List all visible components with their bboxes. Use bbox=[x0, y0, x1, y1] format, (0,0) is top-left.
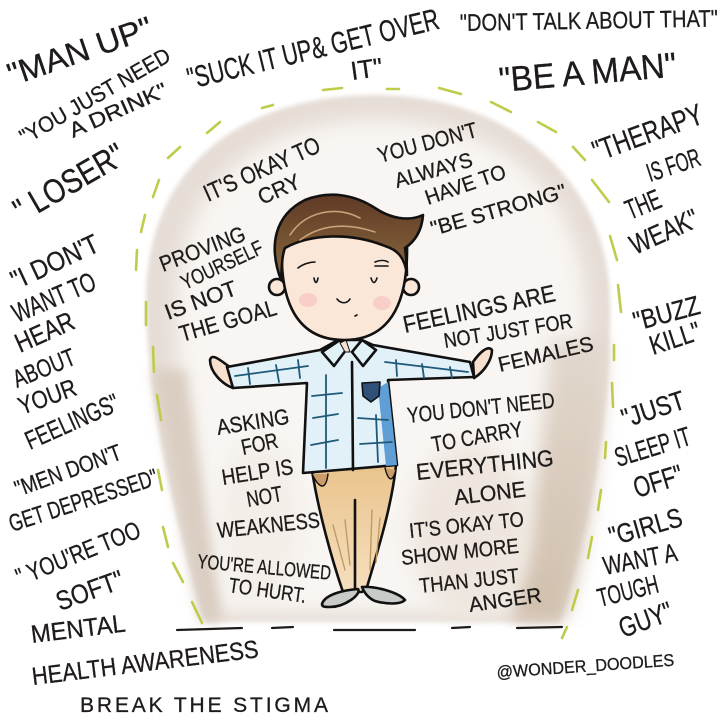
quote: you're too soft: " YOU'RE TOO bbox=[12, 516, 145, 592]
message: it's okay to show more than just anger: ANGER bbox=[467, 584, 543, 617]
heading: mental health awareness: MENTAL bbox=[29, 610, 127, 649]
message: proving yourself is not the goal: THE GOAL bbox=[176, 294, 280, 347]
message: you don't always have to be strong: "BE STRONG" bbox=[428, 180, 569, 241]
ground dashes bbox=[177, 627, 562, 630]
inner supportive messages bbox=[156, 117, 596, 617]
message: you don't need to carry everything alone: EVERYTHING bbox=[415, 445, 555, 485]
quote: suck it up and get over it: IT" bbox=[349, 52, 385, 86]
heading: mental health awareness: HEALTH AWARENESS bbox=[30, 635, 260, 691]
message: you don't need to carry everything alone bbox=[406, 388, 556, 510]
heading: mental health awareness bbox=[29, 610, 260, 691]
message: you're allowed to hurt: YOU'RE ALLOWED bbox=[197, 551, 332, 585]
quote: just sleep it off: "JUST bbox=[618, 385, 689, 434]
message: feelings are not just for females: FEELINGS ARE bbox=[401, 280, 558, 339]
message: feelings are not just for females: NOT JUST FOR bbox=[442, 310, 574, 353]
subheading: break the stigma: BREAK THE STIGMA bbox=[80, 694, 328, 717]
quote: girls want a tough guy bbox=[594, 502, 686, 644]
credit: @WONDER_DOODLES bbox=[496, 651, 675, 682]
message: asking for help is not weakness bbox=[215, 404, 321, 543]
quote: therapy is for the weak: WEAK" bbox=[625, 203, 703, 260]
message: proving yourself is not the goal bbox=[156, 221, 280, 347]
message: feelings are not just for females bbox=[401, 280, 596, 377]
message: you don't need to carry everything alone: TO CARRY bbox=[430, 416, 525, 457]
message: it's okay to cry: CRY bbox=[254, 169, 305, 210]
quote: just sleep it off bbox=[611, 385, 694, 505]
shirt plaid bbox=[235, 360, 468, 468]
collar bbox=[322, 340, 346, 366]
quote: girls want a tough guy: "GIRLS bbox=[605, 502, 686, 552]
button line bbox=[352, 362, 353, 470]
quote: you're too soft bbox=[12, 516, 145, 617]
message: proving yourself is not the goal: PROVING bbox=[156, 221, 249, 277]
message: it's okay to cry: IT'S OKAY TO bbox=[199, 132, 325, 207]
message: you don't always have to be strong: ALWAYS bbox=[392, 149, 475, 193]
quote: i don't want to hear about your feelings: HEAR bbox=[10, 306, 79, 358]
quote: you just need a drink: A DRINK" bbox=[66, 79, 171, 143]
message: asking for help is not weakness: NOT bbox=[245, 481, 284, 512]
message: you don't need to carry everything alone: YOU DON'T NEED bbox=[406, 388, 556, 428]
shirt bbox=[227, 340, 474, 473]
hands bbox=[210, 357, 233, 388]
quote: man up: "MAN UP" bbox=[3, 9, 157, 93]
quote: girls want a tough guy: TOUGH bbox=[594, 569, 662, 613]
shoes bbox=[322, 589, 359, 607]
quote: therapy is for the weak bbox=[588, 98, 707, 260]
dome dashed outline bbox=[136, 88, 621, 638]
quote: i don't want to hear about your feelings: YOUR bbox=[14, 374, 80, 421]
message: asking for help is not weakness: FOR bbox=[239, 428, 280, 460]
figure: man with outstretched arms bbox=[210, 195, 492, 607]
quote: men don't get depressed: "MEN DON'T bbox=[11, 439, 125, 502]
quote: buzz kill: KILL" bbox=[646, 316, 704, 361]
message: you don't always have to be strong: YOU DON'T bbox=[375, 117, 480, 168]
quote: men don't get depressed bbox=[6, 439, 161, 538]
message: it's okay to show more than just anger: THAN JUST bbox=[418, 565, 520, 598]
quote: buzz kill: "BUZZ bbox=[630, 290, 703, 337]
quote: i don't want to hear about your feelings bbox=[6, 229, 124, 455]
message: asking for help is not weakness: ASKING bbox=[215, 404, 291, 440]
message: feelings are not just for females: FEMALES bbox=[496, 333, 596, 377]
message: proving yourself is not the goal: YOURSELF bbox=[177, 236, 267, 295]
quote: girls want a tough guy: WANT A bbox=[600, 537, 680, 581]
hair bbox=[275, 195, 423, 280]
message: it's okay to show more than just anger: IT'S OKAY TO bbox=[408, 508, 525, 543]
message: it's okay to show more than just anger bbox=[400, 508, 543, 617]
quote: suck it up and get over it bbox=[184, 3, 442, 96]
quote: buzz kill bbox=[630, 290, 704, 361]
quote: i don't want to hear about your feelings: ABOUT bbox=[9, 343, 80, 394]
quote: girls want a tough guy: GUY" bbox=[614, 596, 677, 644]
quote: be a man: "BE A MAN" bbox=[497, 46, 678, 100]
message: asking for help is not weakness: WEAKNESS bbox=[216, 507, 321, 543]
message: you're allowed to hurt bbox=[197, 551, 332, 608]
message: asking for help is not weakness: HELP IS bbox=[220, 454, 295, 490]
message: you're allowed to hurt: TO HURT. bbox=[227, 574, 308, 608]
quote: just sleep it off: OFF" bbox=[630, 459, 687, 505]
quote: men don't get depressed: GET DEPRESSED" bbox=[6, 464, 161, 538]
quote: i don't want to hear about your feelings: WANT TO bbox=[8, 267, 100, 329]
head bbox=[282, 230, 407, 340]
message: you don't always have to be strong: HAVE TO bbox=[422, 161, 509, 210]
quote: you're too soft: SOFT" bbox=[52, 565, 128, 617]
trousers bbox=[312, 465, 396, 592]
cheeks bbox=[299, 293, 317, 307]
eyebrows and eyes bbox=[298, 260, 388, 282]
quote: i don't want to hear about your feelings: FEELINGS" bbox=[20, 387, 124, 455]
quote: you just need a drink: "YOU JUST NEED bbox=[15, 43, 175, 149]
panel: beige dome bbox=[120, 95, 620, 668]
quote: i don't want to hear about your feelings: "I DON'T bbox=[6, 229, 104, 295]
message: proving yourself is not the goal: IS NOT bbox=[161, 276, 240, 325]
ears bbox=[269, 279, 285, 295]
quote: therapy is for the weak: THE bbox=[621, 183, 666, 226]
message: you don't always have to be strong bbox=[375, 117, 569, 241]
smile bbox=[337, 299, 357, 316]
message: you don't need to carry everything alone: ALONE bbox=[453, 476, 527, 510]
pocket bbox=[362, 382, 380, 402]
message: it's okay to show more than just anger: SHOW MORE bbox=[400, 535, 520, 570]
quote: loser: " LOSER" bbox=[7, 136, 132, 230]
